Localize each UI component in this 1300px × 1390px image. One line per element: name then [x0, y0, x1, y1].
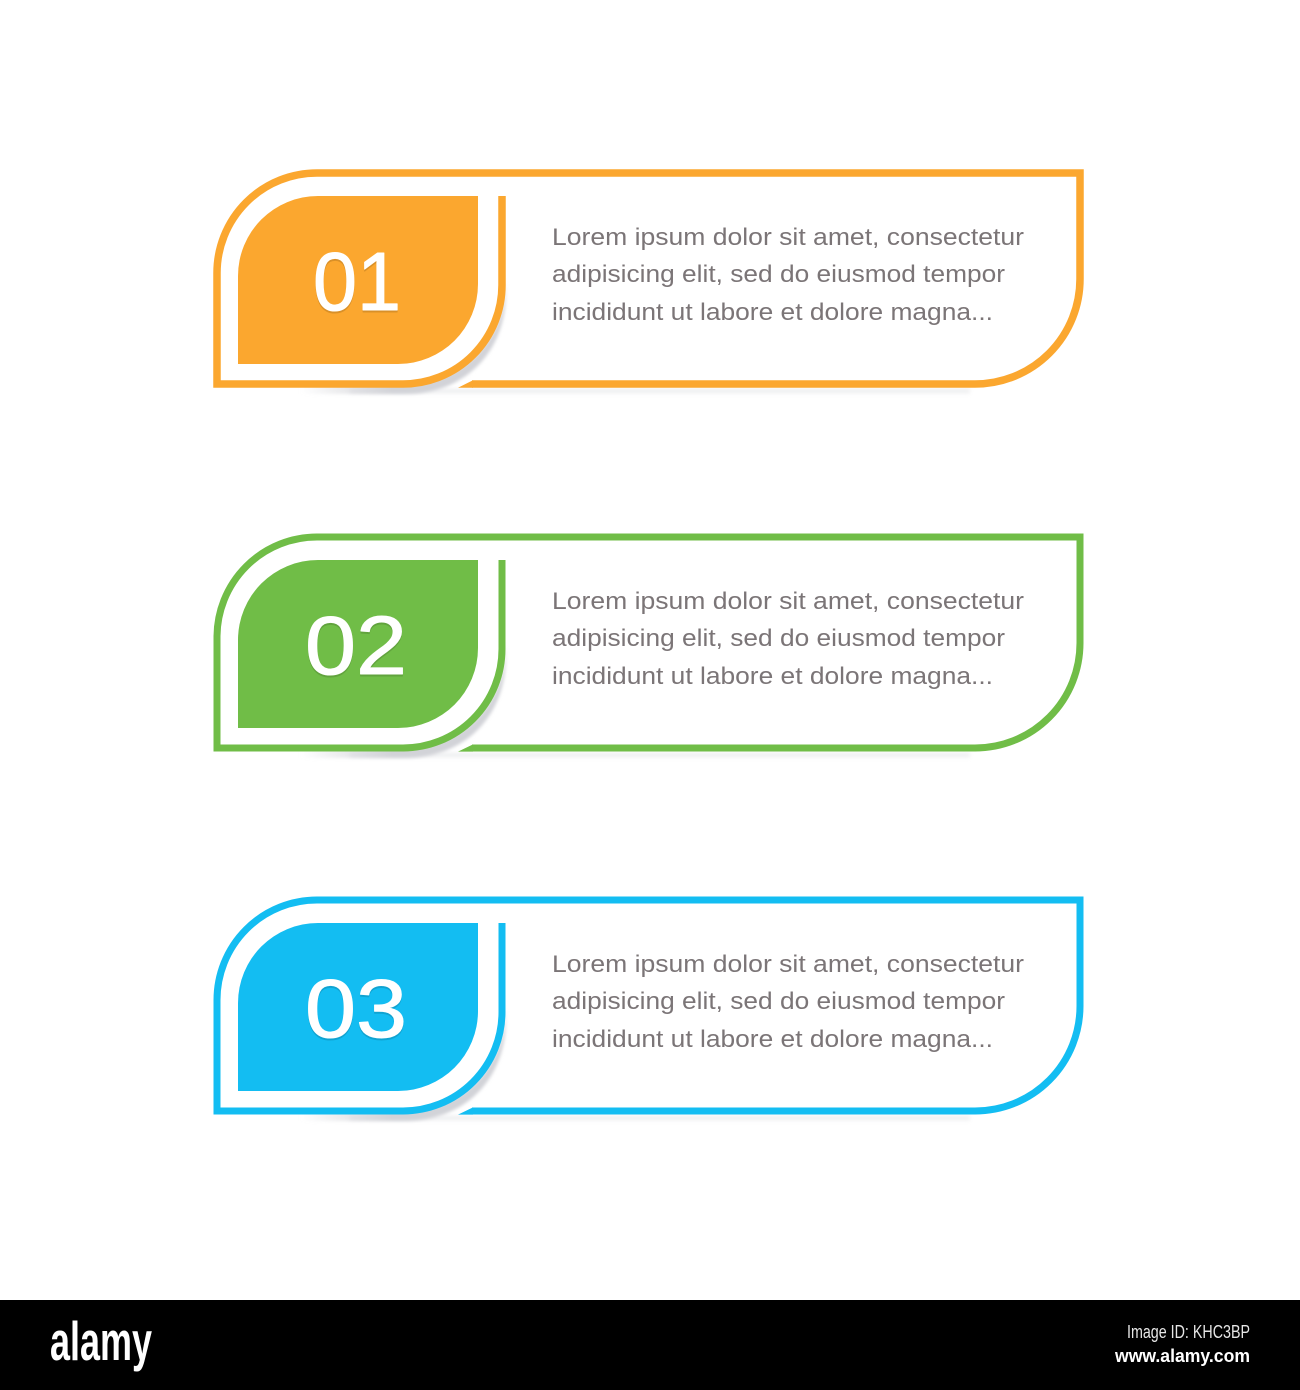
text block 01: Lorem ipsum dolor sit amet, consectetur: [552, 224, 1024, 251]
card outline 01: [217, 173, 1080, 384]
card shadow 02: [350, 753, 970, 757]
card shadow 03: [350, 1116, 970, 1120]
text block 03: incididunt ut labore et dolore magna...: [552, 1026, 993, 1053]
text block 02: [552, 588, 1024, 690]
text block 01: [552, 224, 1024, 326]
card outline 02: [217, 537, 1080, 748]
number 03: 03: [305, 964, 407, 1057]
tab shadow 02: [300, 644, 506, 758]
text block 02: Lorem ipsum dolor sit amet, consectetur: [552, 588, 1024, 615]
card outline 03: [217, 900, 1080, 1111]
text block 01: adipisicing elit, sed do eiusmod tempor: [552, 261, 1005, 288]
number 02: 02: [305, 601, 407, 694]
bottom line tip 01: [458, 380, 473, 388]
text block 03: Lorem ipsum dolor sit amet, consectetur: [552, 951, 1024, 978]
footer bar: [0, 1300, 1300, 1390]
text block 02: incididunt ut labore et dolore magna...: [552, 663, 993, 690]
tab shadow 03: [300, 1007, 506, 1121]
bottom line tip 02: [458, 744, 473, 752]
text block 03: [552, 951, 1024, 1053]
panel: item 03: [217, 900, 1080, 1121]
card shadow 01: [350, 389, 970, 393]
bottom line tip 03: [458, 1107, 473, 1115]
text block 03: adipisicing elit, sed do eiusmod tempor: [552, 988, 1005, 1015]
number 02: 02: [305, 599, 407, 692]
website: www.alamy.com: [1114, 1346, 1250, 1366]
number 01: 01: [313, 235, 401, 328]
footer logo: alamy: [50, 1310, 152, 1372]
tab shadow 01: [300, 280, 506, 394]
panel: item 01: [217, 173, 1080, 394]
image id: Image ID: KHC3BP: [1127, 1322, 1250, 1342]
panel: item 02: [217, 537, 1080, 758]
number 01: 01: [313, 237, 401, 330]
number badge 02: [238, 560, 478, 728]
text block 01: incididunt ut labore et dolore magna...: [552, 299, 993, 326]
number badge 01: [238, 196, 478, 364]
number 03: 03: [305, 962, 407, 1055]
number badge 03: [238, 923, 478, 1091]
text block 02: adipisicing elit, sed do eiusmod tempor: [552, 625, 1005, 652]
